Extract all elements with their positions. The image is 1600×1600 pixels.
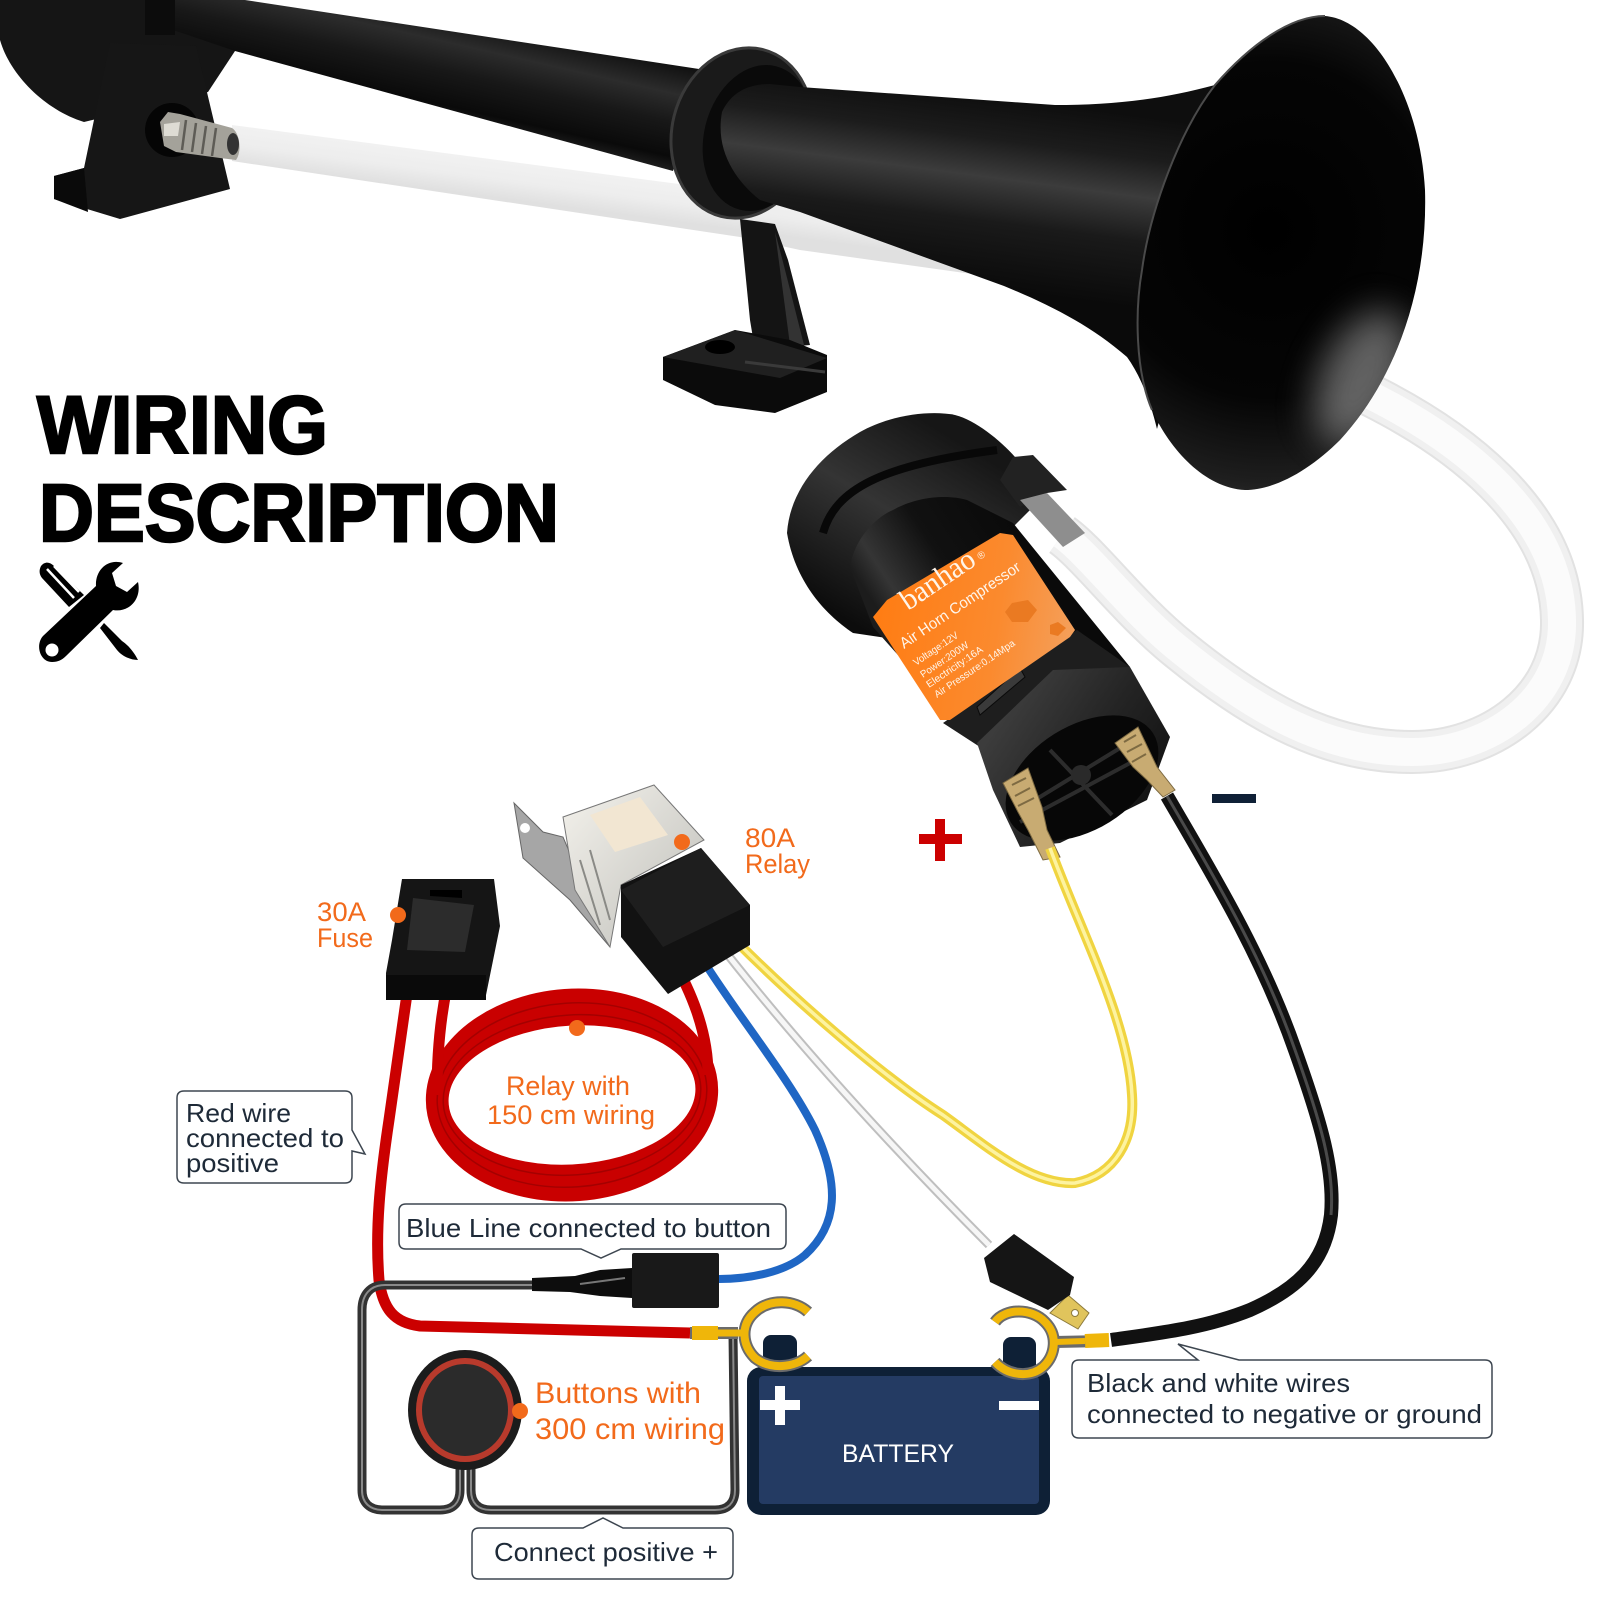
negative ring terminal [995, 1312, 1109, 1374]
air tube behind horn [232, 125, 979, 275]
callout: black and white wires [1072, 1344, 1492, 1438]
callout: red wire: connected to [186, 1123, 344, 1153]
right horn mount [663, 219, 827, 413]
orange label [873, 533, 1075, 720]
red wiring coil [426, 988, 718, 1202]
black wire [1111, 796, 1332, 1340]
30A fuse holder [386, 879, 500, 1000]
main horn tube [173, 0, 699, 171]
callout: connect positive: Connect positive + [494, 1537, 718, 1567]
orange labels: 30A [317, 897, 366, 927]
yellow wire [737, 848, 1132, 1183]
outlet nozzle [1020, 493, 1085, 547]
battery plus [760, 1386, 800, 1425]
black housing [621, 848, 750, 994]
horn bell body [721, 84, 1215, 429]
white wire connector [984, 1234, 1089, 1329]
red wire to positive terminal [378, 987, 690, 1333]
metal bracket [514, 803, 610, 947]
title [37, 380, 559, 559]
title: DESCRIPTION [39, 468, 559, 559]
icon: wrench and screwdriver [39, 562, 139, 662]
callout: black and white wires: connected to negative or ground [1087, 1399, 1482, 1429]
button wire loop [362, 1285, 735, 1510]
label text: ® [976, 549, 988, 562]
callout: red wire: positive [186, 1148, 279, 1178]
clear cover [563, 785, 704, 947]
callout: black and white wires: Black and white wires [1087, 1368, 1350, 1398]
tube rear collar [145, 0, 175, 35]
orange labels: 300 cm wiring [535, 1413, 725, 1446]
lower body band [943, 630, 1130, 747]
callout: blue line [399, 1204, 786, 1258]
left horn mount [0, 0, 245, 219]
positive ring terminal [690, 1302, 808, 1366]
horn collar [653, 33, 831, 233]
red wire relay to coil [672, 958, 708, 1075]
label text [893, 542, 1024, 700]
white wire [710, 932, 989, 1245]
callout: red wire [177, 1091, 365, 1183]
orange labels [317, 823, 810, 1446]
right terminal [1115, 727, 1175, 797]
air compressor [787, 413, 1181, 867]
end ring [977, 667, 1170, 847]
blue wire connector [532, 1253, 719, 1308]
plus sign red [919, 819, 962, 861]
80A relay [514, 785, 750, 994]
orange labels: Relay with [506, 1071, 630, 1101]
label text: Air Pressure:0.14Mpa [933, 638, 1018, 700]
label text: Electricity:16A [925, 644, 986, 690]
rear disc [787, 413, 1040, 640]
title: WIRING [37, 380, 328, 471]
orange labels: Buttons with [535, 1377, 701, 1410]
battery [747, 1335, 1050, 1515]
horn button [408, 1350, 522, 1470]
cylinder body [850, 497, 1130, 747]
callout: red wire: Red wire [186, 1098, 291, 1128]
label text: Power:200W [919, 640, 972, 680]
orange labels: Fuse [317, 923, 373, 953]
battery minus [999, 1401, 1039, 1410]
label text: Air Horn Compressor [897, 559, 1024, 652]
left terminal [1003, 768, 1060, 860]
terminal posts [763, 1335, 797, 1375]
minus sign navy [1212, 794, 1256, 803]
orange labels: Relay [745, 849, 810, 879]
orange marker dots [390, 834, 690, 1419]
blue wire [708, 968, 832, 1279]
orange labels: 150 cm wiring [487, 1100, 655, 1130]
white hose [1062, 395, 1562, 752]
outlet bracket [1000, 455, 1067, 507]
red wire fuse to coil [437, 987, 447, 1095]
bell rim [1138, 16, 1325, 410]
battery label: BATTERY [842, 1440, 954, 1468]
horn bell mouth [1140, 16, 1426, 490]
callout: blue line: Blue Line connected to button [406, 1213, 771, 1243]
label text: Voltage:12V [912, 630, 961, 668]
callout: connect positive [472, 1518, 733, 1579]
silver air fitting [160, 112, 239, 160]
label text: banhao [893, 542, 982, 617]
side slot [977, 668, 1025, 715]
orange labels: 80A [745, 823, 795, 853]
